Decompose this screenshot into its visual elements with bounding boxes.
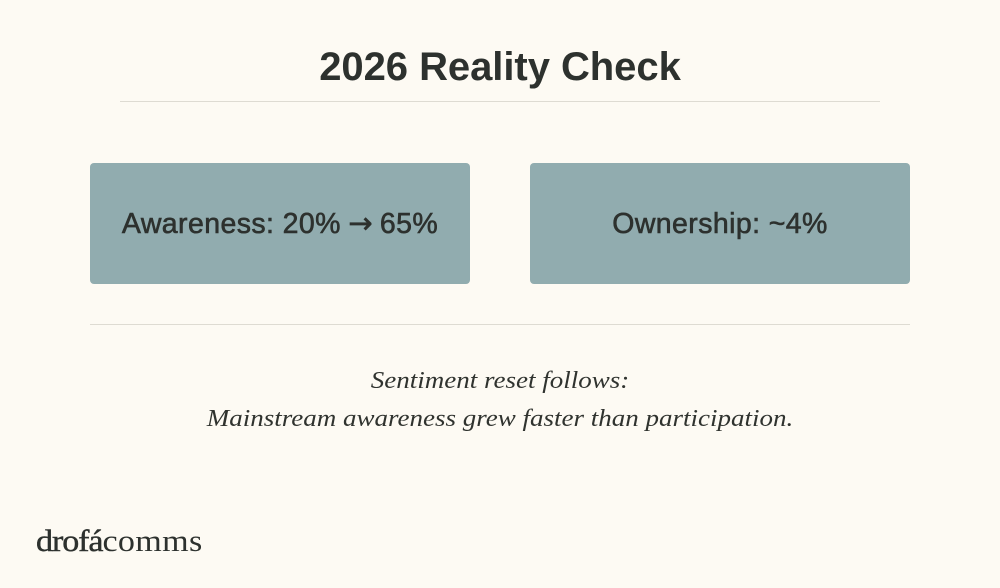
logo: drofácomms: drofácomms [36,523,203,558]
panel: ownership: Ownership: ~4% [612,208,828,240]
text block: sentiment line: Sentiment reset follows: [371,368,629,394]
panel: awareness: Awareness: 20% → 65% [122,206,438,240]
panel: ownership [530,163,910,284]
panel: awareness [90,163,470,284]
title: 2026 Reality Check [319,45,681,89]
text block: awareness line: Mainstream awareness grew faster than participation. [207,406,793,432]
